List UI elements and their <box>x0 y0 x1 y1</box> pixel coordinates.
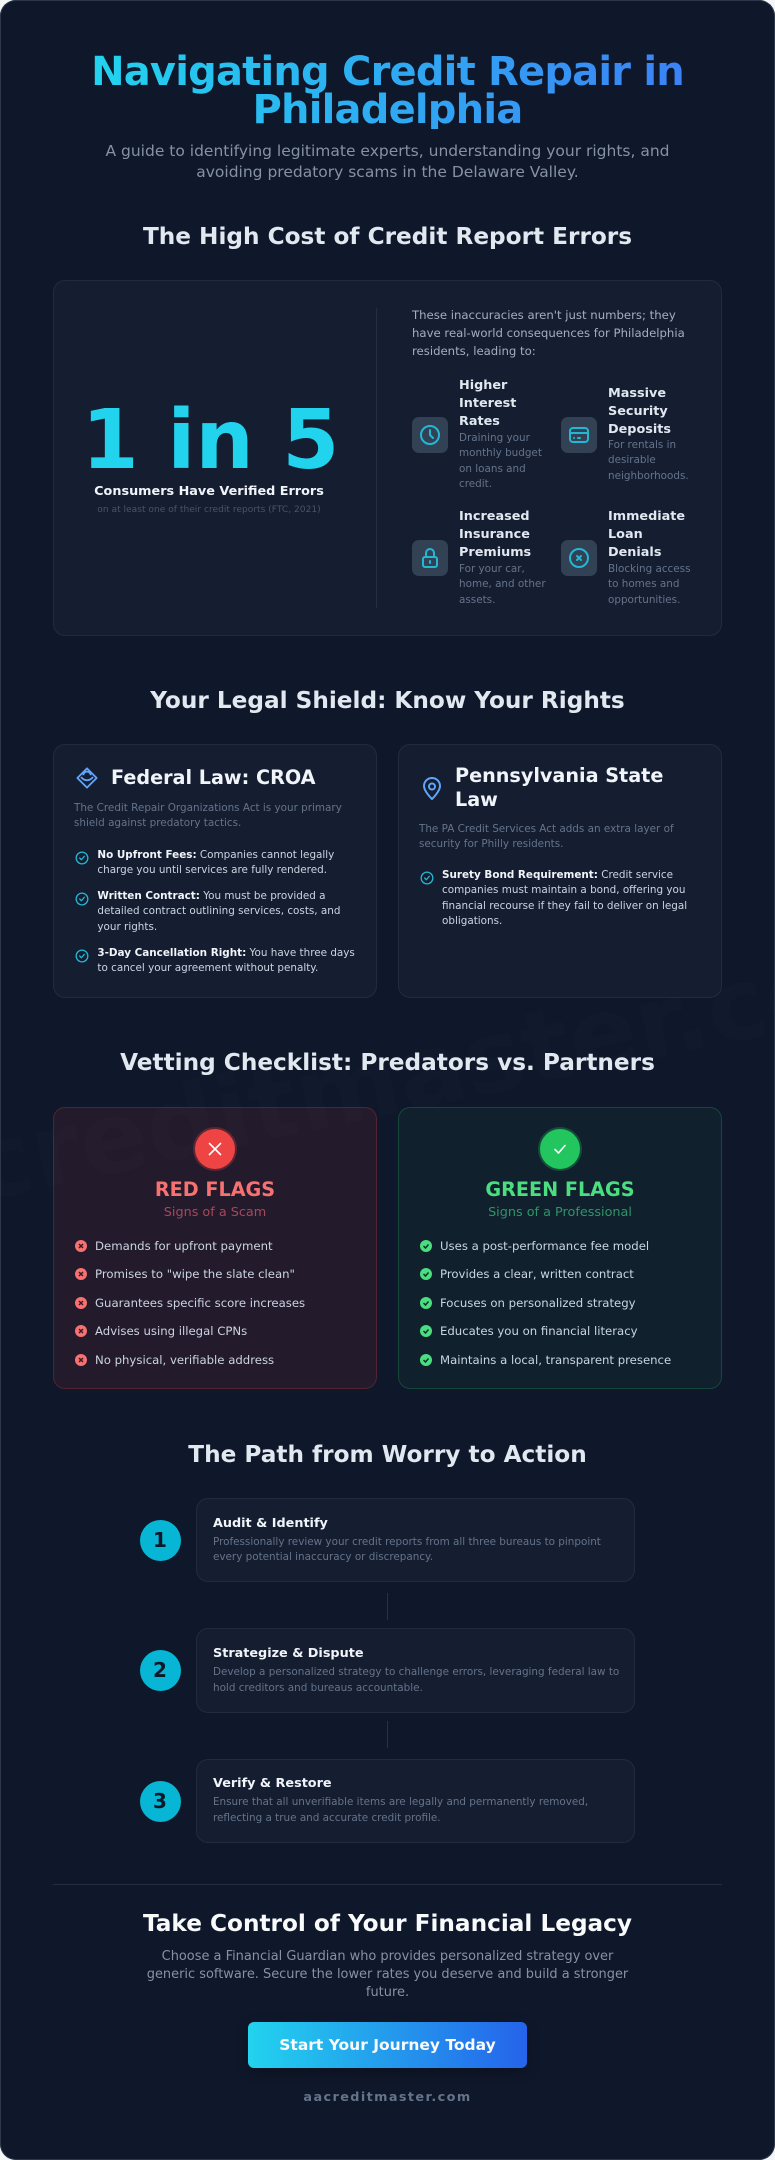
footer text: generic software. Secure the lower rates you deserve and build a stronger <box>147 1966 628 1982</box>
flag <box>419 1295 709 1311</box>
flag: Guarantees specific score increases <box>95 1296 305 1310</box>
item description: opportunities. <box>608 594 680 606</box>
step number: 1 <box>153 1528 167 1552</box>
step number <box>140 1650 180 1690</box>
right text <box>97 890 340 933</box>
right: no upfront fees <box>76 849 334 876</box>
heading: path to action: The Path from Worry to Action <box>188 1440 587 1468</box>
flag: Uses a post-performance fee model <box>440 1239 649 1253</box>
button: Start Your Journey Today <box>279 2036 496 2054</box>
item title: Security <box>608 404 668 419</box>
panel title: Law <box>455 788 498 811</box>
flag: Provides a clear, written contract <box>440 1267 634 1281</box>
footer text <box>0 1948 775 2002</box>
item title <box>608 386 671 437</box>
heading: high cost: The High Cost of Credit Report Errors <box>143 222 632 250</box>
panel subtitle: Signs of a Scam <box>164 1205 266 1220</box>
panel subtitle: Signs of a Professional <box>488 1205 632 1220</box>
title: Navigating Credit Repair in <box>91 49 684 95</box>
website: aacreditmaster.com <box>303 2090 472 2105</box>
step description: Develop a personalized strategy to challenge errors, leveraging federal law to <box>213 1666 619 1678</box>
column divider <box>376 308 377 608</box>
right text: charge you until services are fully rendered. <box>97 864 327 876</box>
item title: Increased <box>459 509 530 524</box>
panel description: The Credit Repair Organizations Act is your primary <box>74 802 342 814</box>
panel description: The PA Credit Services Act adds an extra layer of <box>419 823 674 835</box>
step 3 <box>139 1759 635 1843</box>
button <box>248 2022 527 2068</box>
right text <box>97 947 355 974</box>
flag: Maintains a local, transparent presence <box>440 1353 671 1367</box>
panel title <box>455 764 663 811</box>
step number <box>140 1780 180 1822</box>
panel title: RED FLAGS <box>155 1178 275 1201</box>
statistic source: on at least one of their credit reports (FTC, 2021) <box>97 505 321 515</box>
icon: red x <box>195 1129 235 1169</box>
subtitle: avoiding predatory scams in the Delaware Valley. <box>196 163 579 181</box>
item description: Draining your <box>459 432 530 444</box>
flag: Demands for upfront payment <box>95 1239 273 1253</box>
item description: assets. <box>459 594 495 606</box>
flag <box>419 1352 709 1368</box>
panel: federal law <box>53 744 377 998</box>
step description: hold creditors and bureaus accountable. <box>213 1682 423 1694</box>
panel: red flags <box>53 1107 377 1389</box>
item: increased insurance premiums <box>412 509 546 606</box>
step description <box>213 1535 601 1566</box>
right text <box>442 869 687 927</box>
step number: 2 <box>153 1658 167 1682</box>
item description <box>608 563 690 606</box>
icon: map pin <box>423 777 441 800</box>
statistic label: Consumers Have Verified Errors <box>94 484 324 499</box>
heading: legal shield: Your Legal Shield: Know Your Rights <box>150 686 625 714</box>
icon: check <box>76 852 88 864</box>
item title: Premiums <box>459 545 531 560</box>
icon: lock <box>412 540 448 576</box>
list: red flags <box>75 1239 305 1367</box>
panel description <box>74 802 342 829</box>
item title: Loan <box>608 527 643 542</box>
panel description <box>419 823 674 850</box>
right text: companies must maintain a bond, offering you <box>442 884 685 896</box>
icon: shield <box>76 767 98 789</box>
arrow: connector 2 to 3 <box>387 1721 388 1748</box>
item title: Higher <box>459 378 507 393</box>
step card <box>196 1498 635 1582</box>
right text <box>97 849 334 876</box>
item description: home, and other <box>459 578 546 590</box>
flag: Focuses on personalized strategy <box>440 1296 636 1310</box>
panel description: shield against predatory tactics. <box>74 817 241 829</box>
subtitle <box>105 142 670 181</box>
item: immediate loan denials <box>561 509 690 606</box>
item title <box>459 509 531 560</box>
item title: Insurance <box>459 527 530 542</box>
item title <box>459 378 516 429</box>
icon: check <box>76 892 88 906</box>
step 1 <box>139 1498 635 1582</box>
item: higher interest rates <box>412 378 542 490</box>
item description: to homes and <box>608 578 679 590</box>
item title: Massive <box>608 386 666 401</box>
item description: credit. <box>459 478 492 490</box>
subtitle: A guide to identifying legitimate experts, understanding your rights, and <box>105 142 670 160</box>
item description: desirable <box>608 454 656 466</box>
footer text: future. <box>366 1984 409 2000</box>
big statistic: 1 in 5 <box>82 393 339 488</box>
step number <box>140 1520 180 1560</box>
flag: No physical, verifiable address <box>95 1353 274 1367</box>
item title: Interest <box>459 396 516 411</box>
panel: green flags <box>398 1107 722 1389</box>
right: surety bond <box>420 869 687 927</box>
icon: check <box>76 950 88 962</box>
heading: vetting checklist: Vetting Checklist: Predators vs. Partners <box>120 1048 655 1076</box>
flag: Educates you on financial literacy <box>440 1324 638 1338</box>
step number: 3 <box>153 1788 167 1812</box>
item title: Deposits <box>608 422 671 437</box>
step description: Ensure that all unverifiable items are legally and permanently removed, <box>213 1796 588 1808</box>
step description: reflecting a true and accurate credit profile. <box>213 1812 441 1824</box>
right text: detailed contract outlining services, costs, and <box>97 905 340 917</box>
item description: on loans and <box>459 463 526 475</box>
list: green flags <box>420 1239 671 1367</box>
item: massive security deposits <box>561 386 689 482</box>
flag <box>419 1323 709 1339</box>
item title: Rates <box>459 414 500 429</box>
icon: check <box>420 872 434 884</box>
item title <box>608 509 685 560</box>
step description <box>213 1665 619 1696</box>
panel description: security for Philly residents. <box>419 838 563 850</box>
step description: Professionally review your credit reports from all three bureaus to pinpoint <box>213 1536 601 1548</box>
panel title: Pennsylvania State <box>455 764 663 787</box>
panel: pennsylvania law <box>398 744 722 998</box>
intro text: have real-world consequences for Philadelphia <box>412 326 685 340</box>
item description: monthly budget <box>459 447 542 459</box>
title: Philadelphia <box>253 87 522 133</box>
footer text: Choose a Financial Guardian who provides personalized strategy over <box>162 1948 613 1964</box>
panel title: Federal Law: CROA <box>111 766 316 789</box>
step card <box>196 1628 635 1713</box>
item description: For your car, <box>459 563 525 575</box>
intro text <box>412 308 685 358</box>
right text: financial recourse if they fail to deliver on legal <box>442 900 687 912</box>
title <box>91 49 684 133</box>
icon: circle x <box>561 540 597 576</box>
right: written contract <box>76 890 340 933</box>
intro text: residents, leading to: <box>412 344 536 358</box>
step title: Verify & Restore <box>213 1776 332 1790</box>
footer heading: Take Control of Your Financial Legacy <box>143 1910 632 1936</box>
item description: For rentals in <box>608 439 676 451</box>
right text: your rights. <box>97 921 157 933</box>
right: cancellation <box>76 947 355 974</box>
step title: Audit & Identify <box>213 1516 328 1530</box>
item description <box>608 439 689 482</box>
step description <box>213 1795 588 1827</box>
step 2 <box>139 1628 635 1713</box>
right text: obligations. <box>442 915 502 927</box>
icon: green check <box>540 1129 580 1169</box>
flag: Advises using illegal CPNs <box>95 1324 247 1338</box>
right text: to cancel your agreement without penalty. <box>97 962 318 974</box>
icon: credit card <box>561 417 597 453</box>
panel: credit report errors <box>53 280 722 636</box>
item title: Immediate <box>608 509 685 524</box>
step title: Strategize & Dispute <box>213 1646 364 1660</box>
arrow: connector 1 to 2 <box>387 1593 388 1620</box>
step description: every potential inaccuracy or discrepancy. <box>213 1551 433 1563</box>
item title: Denials <box>608 545 661 560</box>
intro text: These inaccuracies aren't just numbers; they <box>412 308 676 322</box>
flag <box>419 1266 709 1282</box>
right text: Surety Bond Requirement: Credit service <box>442 869 673 881</box>
item description: neighborhoods. <box>608 470 689 482</box>
flag: Promises to "wipe the slate clean" <box>95 1267 295 1281</box>
step card <box>196 1759 635 1843</box>
right text: 3-Day Cancellation Right: You have three days <box>97 947 355 959</box>
right text: No Upfront Fees: Companies cannot legally <box>97 849 334 861</box>
icon: clock <box>412 417 448 453</box>
item description <box>459 563 546 606</box>
item description: Blocking access <box>608 563 690 575</box>
right text: Written Contract: You must be provided a <box>97 890 326 902</box>
item description <box>459 432 542 490</box>
panel title: GREEN FLAGS <box>485 1178 635 1201</box>
